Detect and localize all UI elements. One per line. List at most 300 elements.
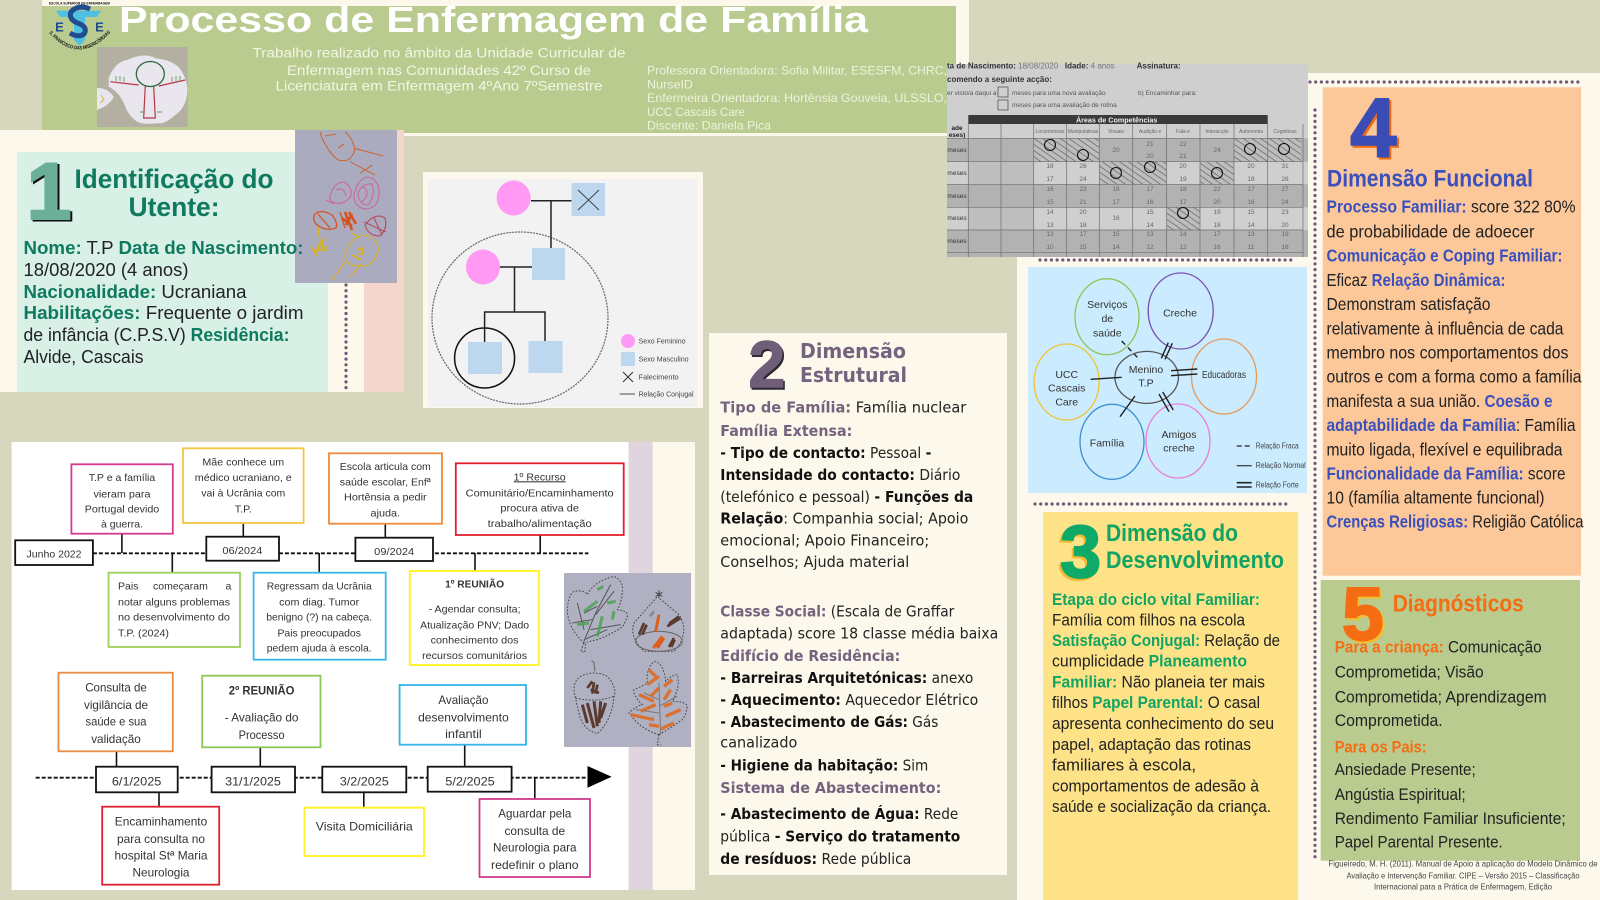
table: competence areas: eses) bbox=[949, 132, 965, 139]
event: awaiting neurology: consulta de bbox=[504, 824, 565, 838]
event: came to Portugal: Portugal devido bbox=[85, 503, 159, 515]
table: competence areas: 12 bbox=[1146, 244, 1154, 251]
text block: development details: familiares à escola, bbox=[1052, 757, 1196, 775]
text block: patient data: Alvide, Cascais bbox=[24, 346, 144, 367]
event: came to Portugal: vieram para bbox=[94, 488, 151, 500]
text block: advisors: UCC Cascais Care bbox=[647, 105, 745, 119]
heading: Identificação do Utente bbox=[74, 164, 274, 222]
table: competence areas: 15 bbox=[1247, 209, 1255, 216]
event: health surveillance visit: Consulta de bbox=[85, 681, 147, 695]
number 3: 3 bbox=[1058, 512, 1099, 595]
table: competence areas: Interacção bbox=[1205, 129, 1229, 135]
logo: ESE school: ESCOLA SUPERIOR DE ENFERMAGEM bbox=[49, 2, 110, 6]
table: competence areas: Visuais bbox=[1108, 129, 1125, 135]
event: development problems: a bbox=[226, 581, 232, 593]
text block: patient data: Habilitações: Frequente o jardim bbox=[24, 302, 304, 323]
event: referral to hospital: para consulta no bbox=[117, 832, 205, 846]
date boxes bbox=[15, 537, 512, 792]
event: health surveillance visit: vigilância de bbox=[84, 698, 148, 712]
ecomap labels: Menino bbox=[1129, 364, 1163, 376]
table: competence areas: 31 bbox=[1281, 163, 1289, 170]
heading: Dimensão Estrutural: Dimensão bbox=[800, 339, 906, 363]
event: first meeting: - Agendar consulta; bbox=[429, 604, 521, 616]
event: awaiting neurology: Aguardar pela bbox=[498, 807, 572, 821]
table: competence areas: 18 bbox=[1213, 222, 1221, 229]
table: competence areas: 19 bbox=[1179, 176, 1187, 183]
text block: functional details: adaptabilidade da Família: Família bbox=[1326, 415, 1576, 435]
text block: functional details: membro nos comportamentos dos bbox=[1326, 342, 1569, 362]
text block: functional details: de probabilidade de adoecer bbox=[1326, 221, 1535, 241]
event: first meeting: conhecimento dos bbox=[431, 634, 519, 646]
ecomap labels: Cascais bbox=[1048, 383, 1085, 395]
event: child development assessment: Avaliação bbox=[438, 693, 489, 707]
text block: structural details: Relação: Companhia social; Apoio bbox=[720, 510, 968, 528]
table: competence areas: 16 bbox=[1281, 244, 1289, 251]
table: competence areas: meses bbox=[947, 170, 967, 177]
event: Ukrainian doctor: vai à Ucrânia com bbox=[201, 487, 286, 499]
table: competence areas: 24 bbox=[1281, 199, 1289, 206]
illustration: child scribbles bbox=[295, 130, 397, 283]
text block: development details: cumplicidade Planeamento bbox=[1052, 653, 1247, 671]
text block: development details: saúde e socialização da criança. bbox=[1052, 798, 1271, 816]
table: competence areas: 20 bbox=[1213, 199, 1221, 206]
table: competence areas: 12 bbox=[1046, 231, 1054, 238]
text block: development details: Satisfação Conjugal: Relação de bbox=[1052, 632, 1280, 650]
text block: structural details: Edifício de Residência: bbox=[720, 647, 900, 665]
text block: development details bbox=[1052, 591, 1280, 816]
heading: Dimensão do Desenvolvimento bbox=[1106, 520, 1284, 574]
text block: functional details: muito ligada, flexível e equilibrada bbox=[1326, 439, 1563, 459]
table: competence areas: 21 bbox=[1179, 153, 1187, 160]
table: competence areas: meses bbox=[947, 193, 967, 200]
date boxes: 31/1/2025 bbox=[225, 775, 281, 789]
text block: development details: Família com filhos na escola bbox=[1052, 612, 1246, 630]
text block: structural details: Tipo de Família: Família nuclear bbox=[720, 398, 967, 416]
text block: reference citation bbox=[1328, 859, 1598, 891]
event: first meeting bbox=[410, 571, 539, 665]
event: development problems: começaram bbox=[153, 581, 208, 593]
event: Ukrainian doctor: T.P. bbox=[235, 503, 252, 515]
event: first resource: Comunitário/Encaminhamento bbox=[466, 487, 614, 499]
text block: patient data: 18/08/2020 (4 anos) bbox=[24, 259, 188, 280]
table: competence areas: 17 bbox=[1112, 199, 1120, 206]
legend: genogram: Sexo Masculino bbox=[639, 354, 689, 364]
event: second meeting: - Avaliação do bbox=[225, 711, 299, 725]
event: return from Ukraine: pedem ajuda à escola. bbox=[267, 643, 372, 655]
text: form header: ta de Nascimento: 18/08/2020 Idade: 4 anos Assinatura: bbox=[947, 62, 1181, 70]
event: second meeting bbox=[202, 676, 320, 747]
ecomap relation lines bbox=[1091, 341, 1197, 417]
text block: reference citation: Internacional para a Prática de Enfermagem, Edição bbox=[1374, 881, 1552, 891]
illustration: child drawing of a person bbox=[97, 47, 188, 127]
table: competence areas: Locomotoras bbox=[1036, 129, 1065, 135]
event: return from Ukraine bbox=[254, 573, 386, 660]
event: Ukrainian doctor: médico ucraniano, e bbox=[195, 472, 292, 484]
event: referral to hospital: hospital Stª Maria bbox=[114, 848, 208, 862]
event: school health bbox=[329, 453, 442, 524]
event: school health: Hortênsia a pedir bbox=[344, 492, 427, 504]
text block: structural details: adaptada) score 18 classe média baixa bbox=[720, 624, 998, 642]
ecomap labels: creche bbox=[1163, 443, 1195, 455]
text block: structural details: Sistema de Abastecimento: bbox=[720, 779, 941, 797]
panel: 1 identification bbox=[0, 130, 404, 392]
event: first meeting: recursos comunitários bbox=[422, 650, 527, 662]
text block: development details: apresenta conhecimento do seu bbox=[1052, 715, 1274, 733]
table: competence areas: 16 bbox=[1247, 199, 1255, 206]
text block: development details: Etapa do ciclo vital Familiar: bbox=[1052, 591, 1260, 609]
table: competence areas: 22 bbox=[1213, 186, 1221, 193]
event: child development assessment: infantil bbox=[445, 727, 482, 741]
event: school health: ajuda. bbox=[371, 508, 400, 520]
date boxes: 06/2024 bbox=[222, 545, 263, 557]
text block: functional details: Processo Familiar: score 322 80% bbox=[1326, 197, 1576, 217]
table: competence areas: 23 bbox=[1281, 209, 1289, 216]
heading: Dimensão Estrutural: Estrutural bbox=[800, 363, 907, 387]
event: first meeting: Atualização PNV; Dado bbox=[420, 619, 529, 631]
text block: structural details: Classe Social: (Escala de Graffar bbox=[720, 603, 955, 621]
title: Processo de Enfermagem de Família bbox=[119, 0, 869, 40]
text block: diagnoses list: Comprometida; Aprendizagem bbox=[1335, 687, 1547, 706]
panel: 3 development dimension bbox=[1043, 510, 1298, 900]
event: health surveillance visit: saúde e sua bbox=[86, 715, 147, 729]
event: school health: Escola articula com bbox=[340, 461, 431, 473]
date boxes: 09/2024 bbox=[374, 546, 414, 558]
table: competence areas: 18 bbox=[1079, 222, 1087, 229]
table: competence areas: 14 bbox=[1146, 222, 1154, 229]
legend: genogram: Relação Conjugal bbox=[639, 390, 694, 398]
table: competence areas: 21 bbox=[1079, 199, 1087, 206]
table: competence areas: 17 bbox=[1079, 231, 1087, 238]
panel: timeline bbox=[12, 442, 695, 890]
heading: Identificação do Utente: Utente: bbox=[128, 192, 220, 222]
text block: patient data: de infância (C.P.S.V) Residência: bbox=[24, 324, 290, 345]
logo: ESE school: S. FRANCISCO DAS MISERICÓRDIAS bbox=[50, 30, 110, 50]
heading: Identificação do Utente: Identificação do bbox=[74, 164, 274, 194]
event: child development assessment bbox=[400, 685, 526, 745]
ecomap labels: saúde bbox=[1093, 328, 1122, 340]
table: competence areas: 27 bbox=[1281, 186, 1289, 193]
text block: functional details: relativamente à influência de cada bbox=[1326, 318, 1564, 338]
text block: diagnoses list: Ansiedade Presente; bbox=[1335, 760, 1476, 779]
table: competence areas: 20 bbox=[1247, 163, 1255, 170]
table: competence areas: 20 bbox=[1281, 222, 1289, 229]
table: competence areas: 20 bbox=[1112, 147, 1120, 154]
event: first resource bbox=[456, 463, 624, 535]
heading: Dimensão do Desenvolvimento: Dimensão do bbox=[1106, 520, 1238, 547]
text: form header: b) Encaminhar para: bbox=[1138, 90, 1197, 97]
ecomap labels bbox=[1048, 299, 1246, 455]
heading: Dimensão do Desenvolvimento: Desenvolvimento bbox=[1106, 547, 1284, 574]
text block: work context bbox=[252, 45, 626, 94]
event: home visit: Visita Domiciliária bbox=[316, 820, 413, 834]
legend: ecomap bbox=[1237, 441, 1306, 490]
text block: work context: Enfermagem nas Comunidades 42º Curso de bbox=[287, 63, 591, 78]
event: home visit bbox=[304, 808, 424, 856]
table: competence areas: 16 bbox=[1213, 244, 1221, 251]
table: competence areas: 14 bbox=[1247, 222, 1255, 229]
text block: structural details: (telefónico e pessoal) - Funções da bbox=[720, 488, 973, 506]
chart: developmental assessment scan bbox=[947, 62, 1308, 257]
table: competence areas: Áreas de Competências bbox=[1076, 115, 1157, 124]
legend: genogram bbox=[620, 334, 694, 398]
text block: work context: Trabalho realizado no âmbito da Unidade Curricular de bbox=[252, 45, 626, 60]
text: form header: meses para uma nova avaliação bbox=[1012, 90, 1106, 97]
panel: 2 structural dimension bbox=[709, 327, 1007, 875]
event: came to Portugal: T.P e a família bbox=[89, 472, 155, 484]
text block: structural details: Conselhos; Ajuda material bbox=[720, 553, 909, 571]
event: health surveillance visit bbox=[58, 673, 173, 751]
event: referral to hospital: Encaminhamento bbox=[115, 814, 208, 828]
event: first resource: 1º Recurso bbox=[514, 471, 566, 483]
text block: diagnoses list: Papel Parental Presente. bbox=[1335, 832, 1503, 851]
table: competence areas: Cognitivas bbox=[1273, 129, 1297, 135]
legend: genogram: Falecimento bbox=[639, 372, 679, 382]
event: first meeting: 1º REUNIÃO bbox=[445, 578, 504, 591]
panel: 5 diagnoses bbox=[1321, 572, 1580, 861]
table: competence areas: 13 bbox=[1247, 231, 1255, 238]
text block: diagnoses list: Angústia Espiritual; bbox=[1335, 785, 1466, 804]
ecomap labels: Família bbox=[1090, 438, 1124, 450]
text: form header: comendo a seguinte acção: bbox=[947, 75, 1052, 84]
event: development problems: no desenvolvimento do bbox=[118, 612, 230, 624]
event: development problems bbox=[108, 573, 240, 647]
text block: functional details: Comunicação e Coping Familiar: bbox=[1326, 246, 1562, 266]
event: development problems: Pais bbox=[118, 581, 138, 593]
table: competence areas: 14 bbox=[1112, 244, 1120, 251]
panel: header banner bbox=[42, 0, 969, 136]
connectors bbox=[116, 523, 540, 808]
text block: structural details: - Abastecimento de Gás: Gás bbox=[720, 713, 938, 731]
text block: diagnoses list: Para os Pais: bbox=[1335, 738, 1427, 757]
legend: genogram: Sexo Feminino bbox=[639, 336, 686, 346]
number 5: 5 bbox=[1342, 572, 1384, 656]
table: competence areas: 16 bbox=[1046, 186, 1054, 193]
text block: diagnoses list: Comprometida. bbox=[1335, 711, 1443, 730]
table: competence areas: 15 bbox=[1112, 231, 1120, 238]
text block: advisors: NurseID bbox=[647, 77, 693, 91]
table: competence areas: 17 bbox=[1179, 199, 1187, 206]
panel: genogram bbox=[423, 172, 703, 408]
number 2: 2 bbox=[748, 327, 785, 401]
panel: ecomap bbox=[1028, 267, 1307, 493]
event: came to Portugal: à guerra. bbox=[101, 519, 143, 531]
date boxes: 6/1/2025 bbox=[112, 775, 162, 789]
text block: functional details: Eficaz Relação Dinâmica: bbox=[1326, 270, 1506, 290]
table: competence areas: 12 bbox=[1179, 244, 1187, 251]
text block: functional details: 10 (família altamente funcional) bbox=[1326, 487, 1544, 507]
heading: Dimensão Estrutural bbox=[800, 339, 907, 387]
text block: patient data bbox=[24, 237, 304, 367]
text block: functional details: manifesta a sua união. Coesão e bbox=[1326, 391, 1553, 411]
text block: diagnoses list: Comprometida; Visão bbox=[1335, 662, 1484, 681]
table: competence areas: 17 bbox=[1213, 231, 1221, 238]
event: awaiting neurology: Neurologia para bbox=[493, 841, 577, 855]
date boxes: Junho 2022 bbox=[26, 548, 82, 560]
text: form header: meses para uma avaliação de rotina bbox=[1012, 102, 1117, 109]
table: competence areas: 10 bbox=[1046, 244, 1054, 251]
heading: Dimensão Funcional: Dimensão Funcional bbox=[1327, 166, 1533, 193]
table: competence areas: meses bbox=[947, 238, 967, 245]
text block: development details: comportamentos de adesão à bbox=[1052, 778, 1260, 796]
genogram: parents bbox=[466, 248, 565, 284]
table: competence areas: 21 bbox=[1146, 141, 1154, 148]
text block: advisors: Professora Orientadora: Sofia Militar, ESESFM, CHRC, bbox=[647, 64, 947, 78]
table: competence areas: 26 bbox=[1079, 163, 1087, 170]
event: development problems: notar alguns problemas bbox=[118, 597, 230, 609]
logo: ESE school: E bbox=[55, 20, 64, 35]
legend: ecomap: Relação Fraca bbox=[1256, 441, 1299, 450]
table: competence areas: 20 bbox=[1146, 153, 1154, 160]
number 1: 1 bbox=[28, 148, 74, 238]
text block: diagnoses list: Para a criança: Comunicação bbox=[1335, 638, 1542, 657]
ecomap labels: Amigos bbox=[1161, 429, 1197, 441]
event: return from Ukraine: Regressam da Ucrânia bbox=[267, 581, 372, 593]
heading: Diagnósticos: Diagnósticos bbox=[1393, 591, 1524, 618]
table: competence areas: 16 bbox=[1146, 199, 1154, 206]
table: competence areas: 15 bbox=[1079, 244, 1087, 251]
ecomap labels: UCC bbox=[1055, 369, 1078, 381]
number 1: 1 bbox=[26, 147, 72, 237]
text block: development details: Familiar: Não planeia ter mais bbox=[1052, 674, 1265, 692]
table: competence areas: 24 bbox=[1213, 147, 1221, 154]
event: came to Portugal bbox=[71, 464, 173, 534]
ecomap labels: Educadoras bbox=[1202, 369, 1246, 381]
event: Ukrainian doctor bbox=[183, 448, 304, 523]
table: competence areas: 14 bbox=[1046, 209, 1054, 216]
table: competence areas: 20 bbox=[1179, 163, 1187, 170]
event: referral to hospital bbox=[102, 807, 219, 885]
legend: ecomap: Relação Normal bbox=[1256, 461, 1306, 470]
table: competence areas: 18 bbox=[1247, 176, 1255, 183]
text block: structural details: Família Extensa: bbox=[720, 422, 852, 440]
table: competence areas: 13 bbox=[1046, 222, 1054, 229]
event: return from Ukraine: benigno (?) na cabeça. bbox=[266, 612, 372, 624]
table: competence areas: 18 bbox=[1112, 186, 1120, 193]
text: form header bbox=[947, 62, 1197, 110]
genogram: children bbox=[455, 328, 562, 388]
table: competence areas: 15 bbox=[1146, 209, 1154, 216]
text block: patient data: Nacionalidade: Ucraniana bbox=[24, 281, 247, 302]
illustration: coloured leaves bbox=[564, 573, 691, 747]
table: competence areas: 17 bbox=[1247, 186, 1255, 193]
table: competence areas: 15 bbox=[1046, 199, 1054, 206]
number 3: 3 bbox=[1060, 510, 1101, 593]
text block: functional details: Demonstram satisfação bbox=[1326, 294, 1490, 314]
text block: diagnoses list bbox=[1335, 638, 1566, 851]
date boxes: 5/2/2025 bbox=[445, 775, 495, 789]
table: competence areas: 19 bbox=[1213, 209, 1221, 216]
table: competence areas: 23 bbox=[1079, 186, 1087, 193]
number 4: 4 bbox=[1352, 83, 1399, 177]
ecomap circles bbox=[1034, 273, 1256, 479]
text block: structural details: Intensidade do contacto: Diário bbox=[720, 466, 960, 484]
number 2: 2 bbox=[750, 329, 787, 403]
text block: functional details: Funcionalidade da Família: score bbox=[1326, 463, 1566, 483]
table: competence areas: 17 bbox=[1046, 176, 1054, 183]
legend: ecomap: Relação Forte bbox=[1256, 481, 1299, 490]
number 4: 4 bbox=[1350, 81, 1397, 175]
text block: structural details: - Barreiras Arquitetónicas: anexo bbox=[720, 669, 973, 687]
table: competence areas: 18 bbox=[1046, 163, 1054, 170]
text block: patient data: Nome: T.P Data de Nascimento: bbox=[24, 237, 304, 258]
event: Ukrainian doctor: Mãe conhece um bbox=[202, 457, 284, 469]
arrow: timeline end bbox=[588, 766, 612, 788]
table: competence areas: 18 bbox=[1179, 186, 1187, 193]
ecomap labels: T.P bbox=[1138, 378, 1154, 390]
text block: structural details: de resíduos: Rede pública bbox=[720, 850, 911, 868]
table: competence areas: ade bbox=[951, 125, 963, 132]
table: competence areas bbox=[947, 115, 1308, 257]
panel: 4 functional dimension bbox=[1323, 81, 1584, 576]
table: competence areas: 16 bbox=[1112, 215, 1120, 222]
table: competence areas: 19 bbox=[1281, 231, 1289, 238]
text block: functional details bbox=[1326, 197, 1584, 531]
text block: advisors: Discente: Daniela Pica bbox=[647, 118, 771, 132]
event: return from Ukraine: com diag. Tumor bbox=[279, 597, 360, 609]
ecomap labels: Serviços bbox=[1087, 299, 1127, 311]
table: competence areas: 24 bbox=[1079, 176, 1087, 183]
text block: structural details: pública - Serviço do tratamento bbox=[720, 828, 960, 846]
table: competence areas: 11 bbox=[1248, 244, 1255, 251]
text block: structural details: - Tipo de contacto: Pessoal - bbox=[720, 444, 931, 462]
table: competence areas: Audição e bbox=[1139, 129, 1161, 135]
genogram: grandparents bbox=[497, 180, 605, 216]
table: competence areas: Fala e bbox=[1176, 129, 1190, 135]
text block: diagnoses list: Rendimento Familiar Insuficiente; bbox=[1335, 809, 1566, 828]
table: competence areas: 13 bbox=[1146, 231, 1154, 238]
event: awaiting neurology: redefinir o plano bbox=[491, 858, 579, 872]
event: return from Ukraine: Pais preocupados bbox=[277, 627, 361, 639]
event: second meeting: Processo bbox=[239, 728, 285, 742]
text block: development details: papel, adaptação das rotinas bbox=[1052, 736, 1251, 754]
table: competence areas: Autonomia bbox=[1239, 129, 1263, 135]
event: second meeting: 2º REUNIÃO bbox=[229, 682, 294, 697]
table: competence areas: meses bbox=[947, 215, 967, 222]
event: first resource: trabalho/alimentação bbox=[488, 518, 592, 530]
text block: structural details: - Aquecimento: Aquecedor Elétrico bbox=[720, 691, 978, 709]
text block: development details: filhos Papel Parental: O casal bbox=[1052, 694, 1260, 712]
event: awaiting neurology bbox=[480, 799, 590, 877]
date boxes: 3/2/2025 bbox=[340, 775, 389, 789]
logo: ESE school: E bbox=[95, 20, 104, 35]
logo: ESE school bbox=[49, 2, 110, 50]
table: competence areas: 14 bbox=[1179, 231, 1187, 238]
event: health surveillance visit: validação bbox=[91, 732, 141, 746]
timeline axes bbox=[36, 553, 589, 778]
text block: structural details: - Higiene da habitação: Sim bbox=[720, 757, 928, 775]
ecomap labels: Care bbox=[1055, 397, 1078, 409]
table: competence areas: 17 bbox=[1146, 186, 1154, 193]
text block: structural details bbox=[720, 398, 998, 868]
ecomap labels: Creche bbox=[1163, 308, 1197, 320]
text block: functional details: Crenças Religiosas: Religião Católica bbox=[1326, 511, 1584, 531]
panel: right cream background bbox=[1017, 73, 1600, 900]
text block: structural details: - Abastecimento de Água: Rede bbox=[720, 804, 958, 823]
table: competence areas: 22 bbox=[1179, 141, 1187, 148]
text block: structural details: canalizado bbox=[720, 734, 797, 752]
event: referral to hospital: Neurologia bbox=[132, 866, 190, 880]
event: first resource: procura ativa de bbox=[500, 502, 579, 514]
table: competence areas: meses bbox=[947, 147, 967, 154]
number 5: 5 bbox=[1344, 574, 1386, 658]
text: form header: er visto/a daqui a bbox=[947, 90, 997, 97]
event: development problems: T.P. (2024) bbox=[118, 627, 169, 639]
text block: advisors bbox=[647, 64, 947, 132]
table: competence areas: 28 bbox=[1281, 176, 1289, 183]
event: child development assessment: desenvolvimento bbox=[418, 711, 509, 725]
text block: advisors: Enfermeira Orientadora: Hortênsia Gouveia, ULSSLO, bbox=[647, 91, 947, 105]
text block: work context: Licenciatura em Enfermagem 4ºAno 7ºSemestre bbox=[276, 79, 602, 94]
